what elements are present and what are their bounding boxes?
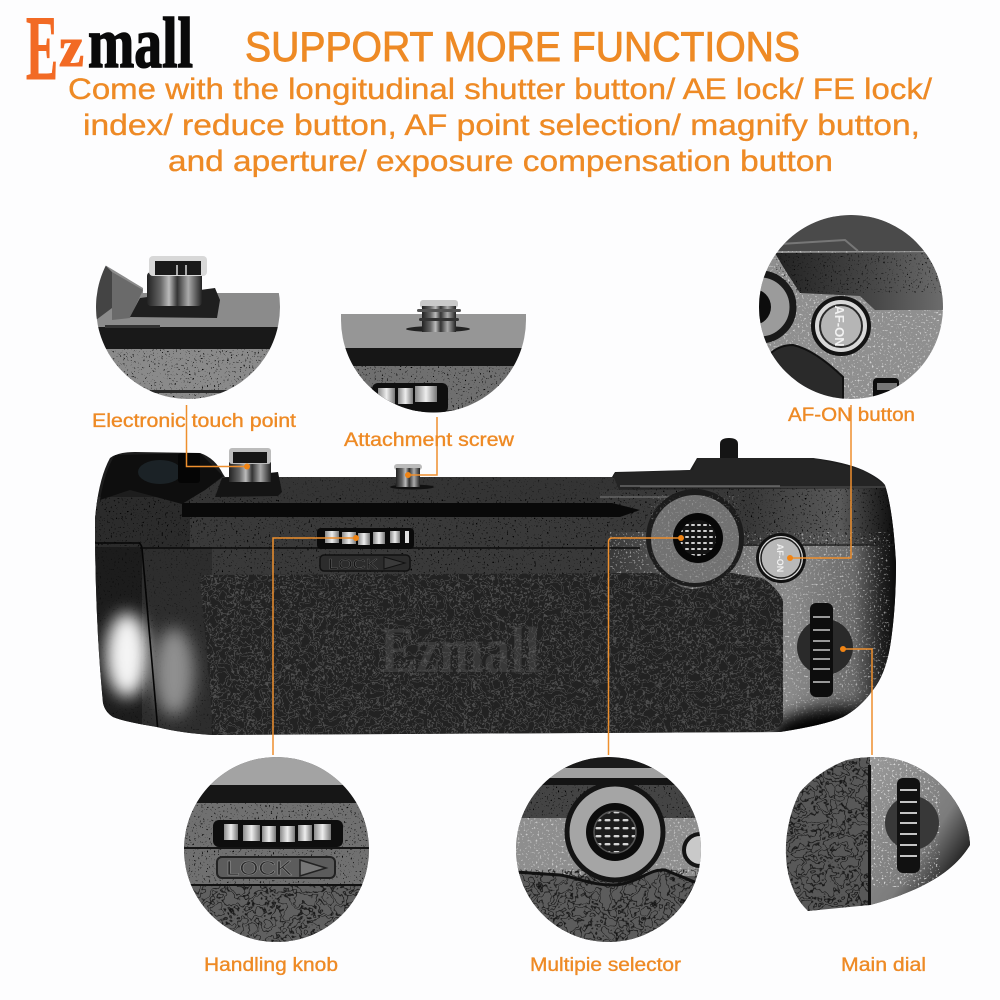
left grip bbox=[95, 547, 145, 725]
description text: index/ reduce button, AF point selection/ magnify button, bbox=[83, 109, 920, 142]
top plate bbox=[182, 477, 630, 503]
handling knob on body bbox=[317, 528, 414, 549]
detail circle: AF-ON button bbox=[759, 215, 943, 399]
left shoulder bbox=[100, 453, 223, 504]
logo: Ezmall: mall bbox=[88, 3, 193, 83]
label: multiple selector: Multipie selector bbox=[530, 955, 682, 976]
callout: electronic touch point bbox=[186, 405, 250, 470]
screw: attachment screw close-up bbox=[406, 300, 470, 332]
logo: Ezmall: E bbox=[26, 0, 58, 99]
detail circle: electronic touch point bbox=[96, 256, 280, 399]
AF-ON button on body: AF-ON bbox=[775, 544, 785, 572]
battery door leather panel bbox=[195, 570, 790, 740]
LOCK label on body bbox=[320, 555, 410, 573]
callout: attachment screw bbox=[405, 417, 437, 478]
label: main dial: Main dial bbox=[841, 955, 926, 976]
detail circle: multiple selector bbox=[516, 757, 716, 943]
description text: and aperture/ exposure compensation button bbox=[168, 145, 833, 178]
detail circle: attachment screw bbox=[341, 314, 526, 414]
callout: multiple selector bbox=[608, 535, 684, 755]
right upper hump bbox=[612, 458, 885, 492]
touch point connector bbox=[130, 256, 220, 318]
label: AF-ON button: AF-ON button bbox=[788, 405, 915, 426]
upper speckled band bbox=[90, 515, 620, 575]
label: electronic touch point: Electronic touch point bbox=[92, 411, 297, 432]
AF-ON button on body bbox=[756, 533, 806, 583]
callout: AF-ON button bbox=[787, 405, 851, 561]
callout: main dial bbox=[840, 646, 872, 755]
watermark: Ezmall bbox=[380, 614, 540, 687]
main dial on body bbox=[797, 603, 853, 697]
callout: handling knob bbox=[273, 535, 359, 755]
label: attachment screw: Attachment screw bbox=[344, 430, 514, 451]
description text bbox=[68, 73, 933, 178]
logo: Ezmall bbox=[26, 0, 193, 99]
detail circle: main dial bbox=[785, 757, 975, 917]
grip post bbox=[720, 438, 738, 472]
multi selector on body bbox=[646, 489, 744, 587]
detail circle: handling knob bbox=[184, 757, 370, 944]
label: handling knob: Handling knob bbox=[204, 955, 338, 976]
right front panel bbox=[610, 532, 900, 740]
embossed LOCK lettering: LOCK bbox=[226, 858, 293, 880]
LOCK label on body: LOCK bbox=[328, 556, 378, 573]
attachment screw on body bbox=[390, 464, 434, 490]
front black band bbox=[182, 503, 640, 517]
title: SUPPORT MORE FUNCTIONS bbox=[245, 23, 800, 70]
logo: Ezmall: z bbox=[59, 17, 84, 79]
battery grip body bbox=[95, 438, 896, 735]
button lettering: AF-ON bbox=[832, 305, 847, 347]
description text: Come with the longitudinal shutter button/ AE lock/ FE lock/ bbox=[68, 73, 933, 106]
electronic touch point on body bbox=[215, 448, 282, 497]
